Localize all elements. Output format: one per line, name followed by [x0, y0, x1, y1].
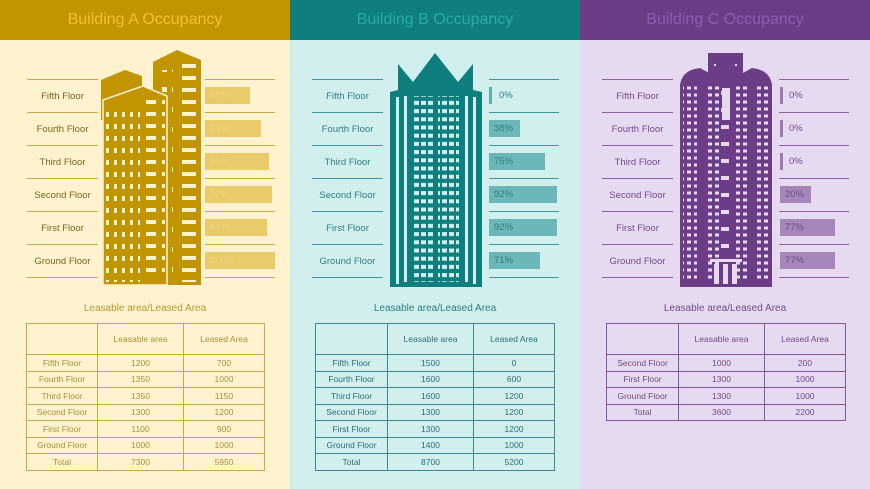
table B: 1200 — [505, 424, 523, 434]
table B: 8700 — [421, 457, 440, 467]
table A: 7300 — [131, 457, 150, 467]
floor labels A — [34, 91, 91, 267]
bars B: 92% — [494, 222, 513, 233]
bars C: 20% — [785, 189, 804, 200]
floor labels C: Third Floor — [615, 157, 660, 168]
table C — [606, 323, 846, 421]
table C: 1300 — [712, 374, 731, 384]
bars C — [780, 87, 835, 269]
floor labels C: First Floor — [616, 223, 659, 234]
bars B: 0% — [499, 90, 513, 101]
bars A: 58% — [210, 90, 229, 101]
table C: Leasable area — [695, 334, 748, 344]
table A: Third Floor — [41, 391, 83, 401]
table A: Ground Floor — [37, 440, 87, 450]
table C: 1000 — [796, 374, 814, 384]
table title A: Leasable area/Leased Area — [84, 303, 206, 314]
table A — [26, 323, 265, 471]
bars A: 74% — [210, 123, 229, 134]
table C: 1300 — [712, 391, 731, 401]
panel: building A — [0, 0, 290, 489]
table A: 900 — [217, 424, 231, 434]
heading: Building B: Building B Occupancy — [357, 11, 513, 28]
heading: Building C: Building C Occupancy — [646, 11, 804, 28]
floor labels A: Third Floor — [40, 157, 85, 168]
table A: 1200 — [215, 407, 233, 417]
bars A — [205, 87, 275, 269]
table B: 1300 — [421, 424, 440, 434]
table B: Total — [343, 457, 360, 467]
table A: Leasable area — [114, 334, 167, 344]
floor labels A: Fourth Floor — [37, 124, 88, 135]
table A: First Floor — [43, 424, 81, 434]
panel: building B — [290, 0, 580, 489]
table B: 1500 — [421, 358, 440, 368]
table B: 0 — [512, 358, 516, 368]
floor labels B: First Floor — [326, 223, 369, 234]
floor labels A: Second Floor — [34, 190, 91, 201]
floor labels A: Fifth Floor — [41, 91, 84, 102]
bars A: 100% — [210, 255, 234, 266]
table A: 1300 — [131, 407, 150, 417]
bars A: 85% — [210, 156, 229, 167]
table B: First Floor — [332, 424, 371, 434]
heading: Building A — [0, 0, 290, 40]
floor labels C: Fourth Floor — [612, 124, 663, 135]
table C: 200 — [798, 358, 812, 368]
table A: Fourth Floor — [39, 374, 85, 384]
table A: 700 — [217, 358, 231, 368]
floor labels C: Ground Floor — [610, 256, 665, 267]
table C: 1000 — [712, 358, 731, 368]
table B: 1300 — [421, 407, 440, 417]
table B: 5200 — [505, 457, 523, 467]
floor labels C — [609, 91, 666, 267]
bars B: 75% — [494, 156, 513, 167]
table C: First Floor — [623, 374, 662, 384]
floor labels A: Ground Floor — [34, 256, 90, 267]
bars C: 77% — [785, 222, 804, 233]
table A: 1200 — [131, 358, 150, 368]
table A: 1000 — [215, 440, 233, 450]
table A: Total — [53, 457, 71, 467]
table A: Second Floor — [37, 407, 87, 417]
bars B: 92% — [494, 189, 513, 200]
bars B: 38% — [494, 123, 513, 134]
floor labels B: Ground Floor — [320, 256, 375, 267]
table A: 1350 — [131, 391, 150, 401]
table C: 3600 — [712, 407, 731, 417]
bars C: 77% — [785, 255, 804, 266]
panel: building C — [580, 0, 870, 489]
table B — [315, 323, 555, 471]
table title C: Leasable area/Leased Area — [664, 303, 786, 314]
bars B — [489, 87, 557, 269]
table A: 1350 — [131, 374, 150, 384]
table A: 1000 — [215, 374, 233, 384]
table B: Leasable area — [404, 334, 457, 344]
floor labels C: Fifth Floor — [616, 91, 659, 102]
bars C: 0% — [789, 90, 803, 101]
floor labels C: Second Floor — [609, 190, 666, 201]
table B: 1200 — [505, 391, 523, 401]
table C: Leased Area — [781, 334, 829, 344]
bars A: 82% — [210, 222, 229, 233]
heading: Building A: Building A Occupancy — [68, 11, 222, 28]
table B: Leased Area — [490, 334, 538, 344]
icon: building B — [390, 53, 482, 287]
heading: Building B — [290, 0, 580, 40]
floor labels B — [319, 91, 376, 267]
table B: 1400 — [421, 440, 440, 450]
floor labels B: Fifth Floor — [326, 91, 369, 102]
table A: 1000 — [131, 440, 150, 450]
table C: 2200 — [796, 407, 814, 417]
table B: 1000 — [505, 440, 523, 450]
table B: 1600 — [421, 374, 440, 384]
heading: Building C — [580, 0, 870, 40]
table B: Second Floor — [326, 407, 377, 417]
table B: 1600 — [421, 391, 440, 401]
table C: Ground Floor — [617, 391, 668, 401]
table C: Total — [634, 407, 651, 417]
table B: Fifth Floor — [332, 358, 371, 368]
table A: 5950 — [215, 457, 233, 467]
bars B: 71% — [494, 255, 513, 266]
table B: 1200 — [505, 407, 523, 417]
table C: 1000 — [796, 391, 814, 401]
table B: Fourth Floor — [328, 374, 375, 384]
floor labels B: Second Floor — [319, 190, 376, 201]
floor labels B: Fourth Floor — [322, 124, 373, 135]
table B: Ground Floor — [326, 440, 377, 450]
table B: Third Floor — [331, 391, 372, 401]
table A: Fifth Floor — [43, 358, 81, 368]
table C: Second Floor — [617, 358, 668, 368]
floor labels A: First Floor — [41, 223, 84, 234]
table A: 1150 — [215, 391, 233, 401]
table A: 1100 — [131, 424, 150, 434]
bars A: 92% — [210, 189, 229, 200]
table title B: Leasable area/Leased Area — [374, 303, 496, 314]
bars C: 0% — [789, 123, 803, 134]
icon: building A — [101, 50, 201, 285]
bars C: 0% — [789, 156, 803, 167]
table A: Leased Area — [200, 334, 248, 344]
floor labels B: Third Floor — [325, 157, 370, 168]
table B: 600 — [507, 374, 521, 384]
icon: building C — [680, 53, 772, 287]
